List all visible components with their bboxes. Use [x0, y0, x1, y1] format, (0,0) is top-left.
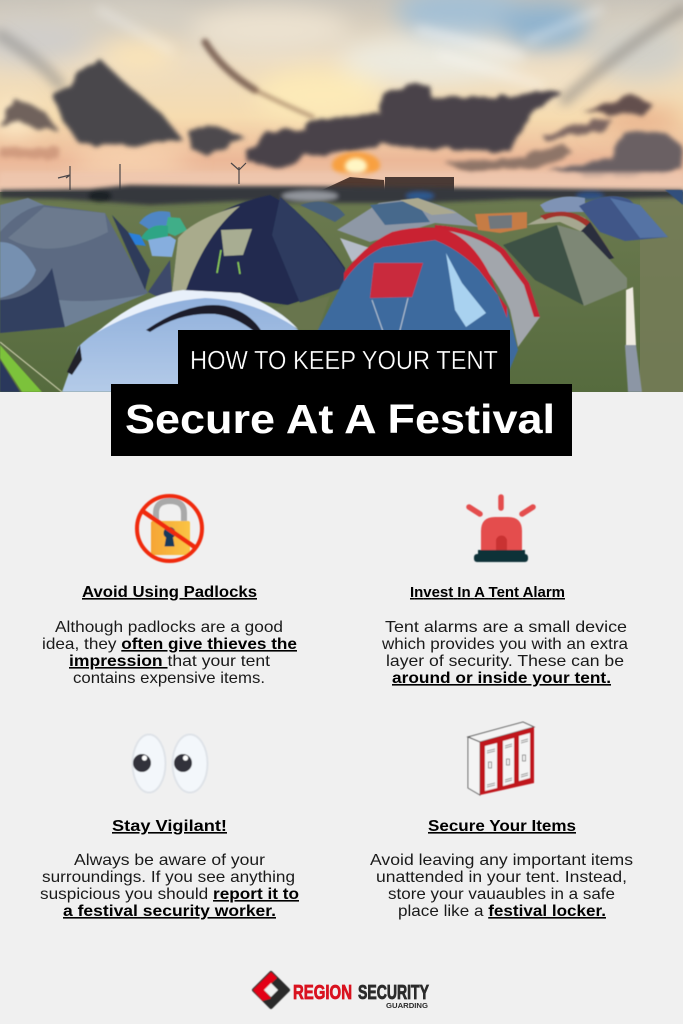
panel: avoid using padlocks — [42, 496, 297, 687]
panel: secure your items — [370, 722, 633, 920]
icon: red lockers — [468, 722, 534, 795]
white post — [625, 287, 642, 392]
heading: Stay Vigilant! — [112, 818, 227, 835]
text block: suspicious you should report it to — [40, 886, 299, 903]
sky with clouds — [0, 0, 683, 195]
text block: Always be aware of your — [74, 852, 266, 869]
title — [111, 330, 572, 456]
icon: red siren alarm — [469, 497, 533, 562]
cirrus streaks — [0, 10, 683, 100]
white front tent — [62, 290, 298, 392]
wind turbines — [58, 163, 246, 190]
text block: Avoid leaving any important items — [370, 852, 633, 869]
logo tagline: GUARDING — [386, 1001, 428, 1010]
text block: Although padlocks are a good — [55, 619, 283, 636]
heading: Avoid Using Padlocks — [82, 584, 257, 601]
text block — [381, 619, 628, 687]
text block: contains expensive items. — [73, 670, 265, 687]
text block: layer of security. These can be — [386, 653, 624, 670]
navy centre tent — [148, 195, 370, 305]
horizon buildings — [0, 177, 683, 205]
lime tent corner — [0, 342, 62, 392]
text block: store your vauaubles in a safe — [388, 886, 615, 903]
text block: around or inside your tent. — [392, 670, 611, 687]
grass behind front tents — [276, 300, 326, 330]
text block: Tent alarms are a small device — [385, 619, 627, 636]
text block — [40, 852, 299, 920]
panel: stay vigilant — [40, 734, 299, 920]
text block — [370, 852, 633, 920]
grass — [0, 192, 683, 392]
icon: eyes — [132, 734, 208, 792]
title box: secure at a festival: Secure At A Festival — [125, 396, 555, 442]
dark diagonal cloud streak — [205, 42, 313, 117]
logo: region security guarding — [254, 973, 429, 1010]
text block: impression that your tent — [69, 653, 271, 670]
text block: unattended in your tent. Instead, — [376, 869, 627, 886]
green tent — [503, 225, 627, 306]
text block: which provides you with an extra — [381, 636, 628, 653]
text block: surroundings. If you see anything — [42, 869, 295, 886]
heading: Invest In A Tent Alarm — [410, 584, 565, 601]
text block: place like a festival locker. — [398, 903, 606, 920]
logo wordmark second word: SECURITY — [358, 982, 429, 1004]
icon: diamond mark — [254, 973, 288, 1007]
distant tents — [125, 190, 683, 262]
icon: crossed out padlock — [137, 496, 202, 561]
title box: how to keep your tent: HOW TO KEEP YOUR TENT — [190, 345, 498, 375]
logo wordmark: REGION — [293, 982, 352, 1004]
text block: idea, they often give thieves the — [42, 636, 297, 653]
red and blue tent — [318, 224, 540, 370]
photo: tents at sunset — [0, 0, 683, 392]
text block: a festival security worker. — [63, 903, 276, 920]
title box: how to keep your tent — [178, 330, 510, 386]
grey-blue left tent — [0, 198, 150, 333]
heading: Secure Your Items — [428, 818, 576, 835]
panel: invest in a tent alarm — [381, 497, 628, 687]
text block — [42, 619, 297, 687]
title box: secure at a festival — [111, 384, 572, 456]
